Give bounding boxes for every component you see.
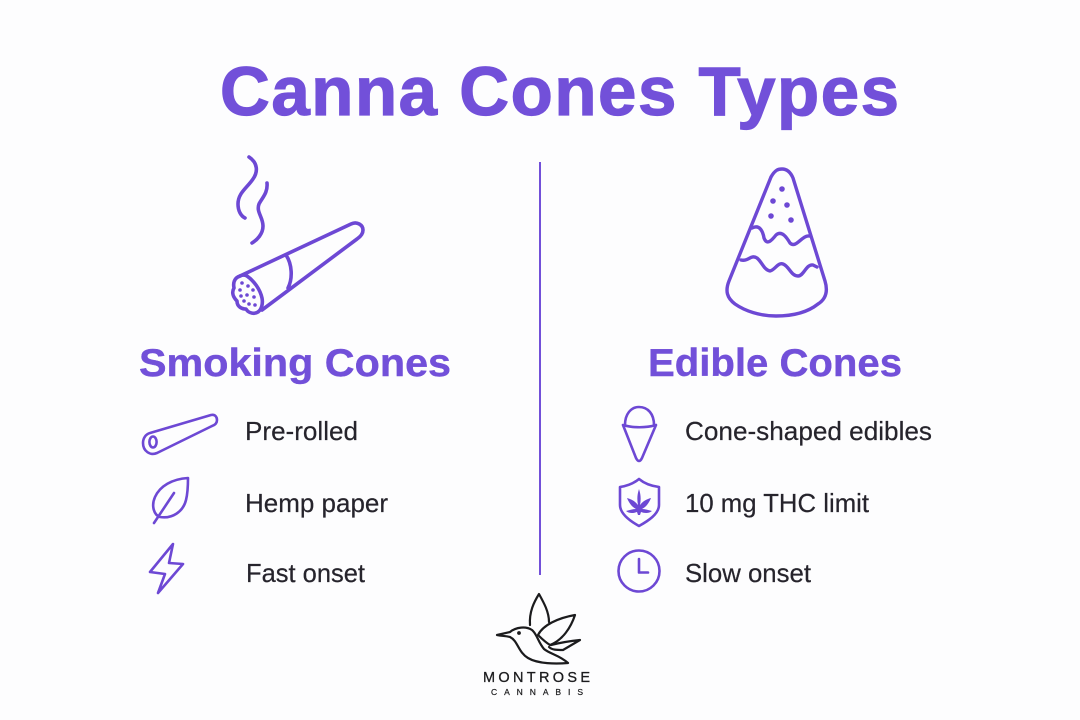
label: cone-shaped edibles: Cone-shaped edibles	[685, 416, 932, 446]
item: THC limit	[620, 479, 870, 526]
label: pre-rolled: Pre-rolled	[245, 416, 358, 446]
label: slow onset: Slow onset	[685, 558, 812, 588]
center divider	[539, 162, 541, 575]
wordmark: Montrose: MONTROSE	[483, 670, 590, 686]
icon: smoking joint	[233, 157, 363, 313]
logo: Montrose Cannabis	[483, 594, 590, 697]
item: hemp paper	[153, 478, 388, 523]
heading: smoking cones: Smoking Cones	[139, 342, 451, 385]
item: fast onset	[150, 544, 366, 593]
wordmark: Cannabis: CANNABIS	[491, 687, 583, 697]
item: slow onset	[618, 550, 812, 592]
icon: edible cone	[727, 169, 826, 316]
panel: edible cones	[618, 169, 932, 592]
icon: leaf	[153, 478, 188, 523]
label: fast onset: Fast onset	[246, 558, 366, 588]
item: pre-rolled	[143, 415, 358, 454]
icon: cone-shaped edible	[623, 407, 656, 461]
label: THC limit: 10 mg THC limit	[685, 488, 870, 518]
heading: edible cones: Edible Cones	[648, 342, 902, 385]
icon: clock	[618, 550, 660, 592]
title: Canna Cones Types	[220, 53, 899, 130]
item: cone-shaped edibles	[623, 407, 932, 461]
icon: pre-rolled cone	[143, 415, 217, 454]
icon: hummingbird and leaf	[497, 594, 580, 663]
panel: smoking cones	[139, 157, 451, 593]
icon: lightning bolt	[150, 544, 183, 593]
icon: shield with cannabis leaf	[620, 479, 659, 526]
label: hemp paper: Hemp paper	[245, 488, 388, 518]
